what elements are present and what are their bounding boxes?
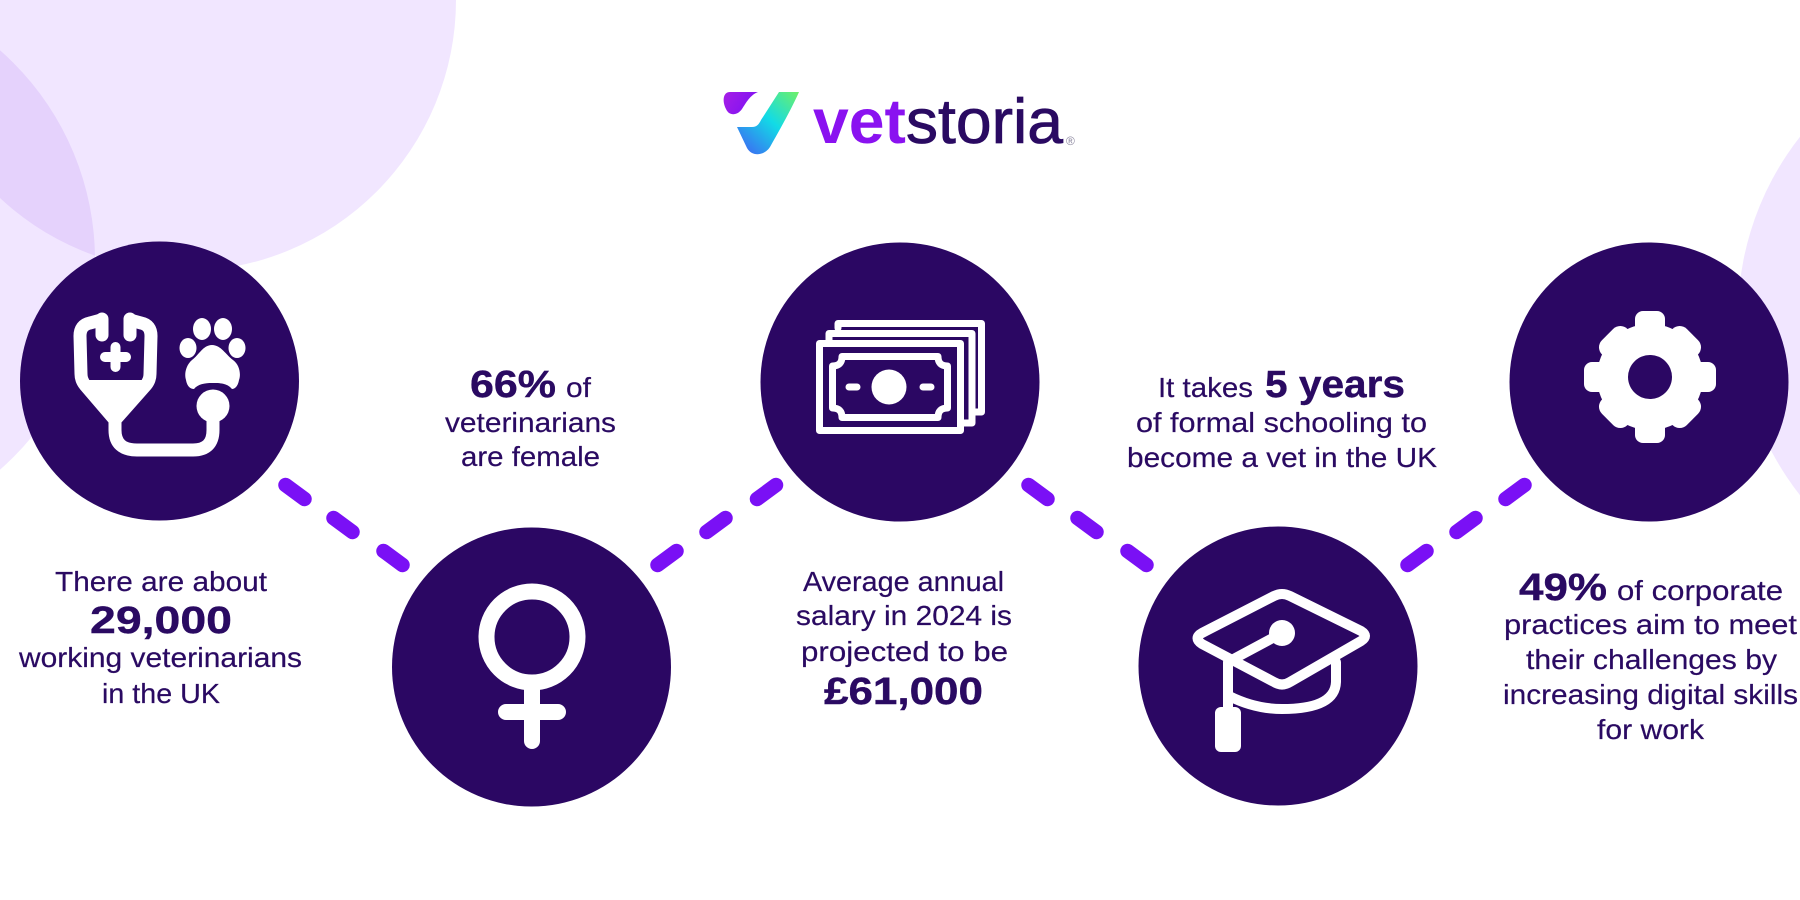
icon: gear <box>1584 311 1716 443</box>
text: 5 years of schooling <box>1127 364 1437 473</box>
text: 49% corporate practices: for work <box>1597 714 1705 745</box>
step 2: female symbol circle <box>392 528 671 806</box>
text: 49% corporate practices: of corporate <box>1617 575 1783 606</box>
text: 66% female: veterinarians <box>445 407 616 438</box>
text: 49% corporate practices: 49% <box>1519 567 1607 609</box>
text: 49% corporate practices: practices aim to meet <box>1504 609 1797 640</box>
step 1: stethoscope circle <box>20 242 299 520</box>
step 3: banknotes circle <box>760 242 1040 522</box>
step 4: graduation cap circle <box>1138 526 1418 806</box>
text: 66% female <box>445 364 616 472</box>
text: 66% female: 66% <box>470 364 556 406</box>
text: average salary: £61,000 <box>824 671 983 713</box>
background blobs <box>0 0 1800 606</box>
text: 49% corporate practices: their challenges by <box>1526 644 1777 675</box>
text: 49% corporate practices <box>1503 567 1798 745</box>
icon: female symbol <box>486 592 578 741</box>
text: 5 years of schooling: become a vet in the UK <box>1127 442 1437 473</box>
text: average salary: projected to be <box>801 636 1008 667</box>
text: 5 years of schooling: It takes <box>1158 372 1253 403</box>
icon: banknotes <box>820 324 982 430</box>
text: 29,000 veterinarians <box>18 566 302 709</box>
icon: graduation cap <box>1198 594 1365 752</box>
text: average salary: Average annual <box>803 566 1004 597</box>
text: 5 years of schooling: 5 years <box>1265 364 1405 406</box>
text: 29,000 veterinarians: working veterinarians <box>18 642 302 673</box>
logo mark <box>724 92 799 154</box>
logo: vetstoria <box>724 87 1075 157</box>
text: 49% corporate practices: increasing digital skills <box>1503 679 1798 710</box>
text: 29,000 veterinarians: 29,000 <box>90 600 232 642</box>
text: 29,000 veterinarians: in the UK <box>102 678 220 709</box>
registered mark: ® <box>1066 134 1075 148</box>
icon: stethoscope and paw <box>80 318 246 450</box>
logo wordmark: vetstoria <box>813 87 1064 157</box>
text: 66% female: of <box>566 372 591 403</box>
text: 5 years of schooling: of formal schooling to <box>1136 407 1427 438</box>
text: average salary: salary in 2024 is <box>796 600 1012 631</box>
step 5: gear circle <box>1510 242 1788 522</box>
text: 66% female: are female <box>461 441 600 472</box>
text: average salary <box>796 566 1012 713</box>
connector dashes <box>286 485 1524 565</box>
text: 29,000 veterinarians: There are about <box>55 566 267 597</box>
